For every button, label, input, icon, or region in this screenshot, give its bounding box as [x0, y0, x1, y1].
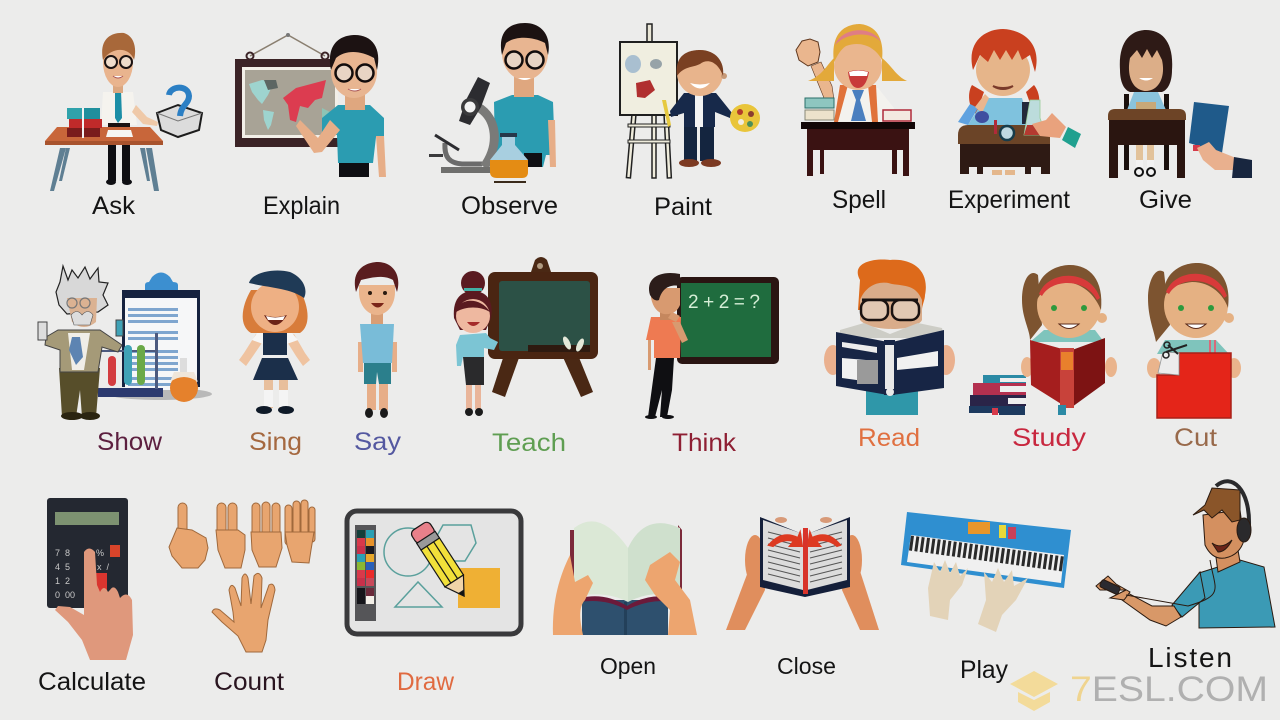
label: Draw: Draw: [397, 668, 455, 696]
item: Ask: [45, 33, 202, 220]
icon: man pointing at a world map: [235, 33, 386, 177]
icon: drawing tablet with shapes and pencil: [347, 511, 521, 634]
item: Think: [645, 273, 779, 457]
item: Observe: [429, 23, 558, 220]
icon: finger pressing calculator: 4 5: [55, 562, 70, 572]
icon: girl reading with stack of books: [969, 265, 1117, 416]
item: Say: [354, 262, 402, 456]
label: Cut: Cut: [1174, 424, 1217, 452]
item: Count: [169, 500, 315, 696]
item: Sing: [239, 270, 310, 456]
item: Read: [824, 260, 955, 452]
icon: counting hands one to five: [169, 500, 315, 652]
label: Play: Play: [960, 656, 1008, 684]
icon: finger pressing calculator: [47, 498, 133, 660]
item: Give: [1108, 30, 1252, 214]
icon: man thinking at chalkboard: [645, 273, 779, 419]
icon: graduation cap: [1010, 671, 1058, 711]
label: Sing: Sing: [249, 428, 302, 456]
icon: hands closing a book: [726, 517, 879, 630]
icon: man listening with headphones: [1096, 481, 1275, 628]
board equation: 2 + 2 = ?: [688, 292, 760, 313]
icon: finger pressing calculator: 0 00: [55, 590, 75, 600]
item: Explain: [235, 33, 386, 220]
icon: boy painting at easel: [620, 24, 760, 178]
icon: teacher beside chalkboard: [454, 257, 598, 416]
icon: boy speaking: [355, 262, 398, 418]
label: Open: Open: [600, 653, 656, 679]
item: Open: [553, 521, 697, 679]
icon: man at desk with question box: [45, 33, 202, 191]
label: Teach: Teach: [492, 429, 566, 457]
icon: finger pressing calculator: x /: [97, 562, 110, 572]
label: Observe: Observe: [461, 192, 558, 220]
label: Paint: Paint: [654, 193, 712, 221]
label: Read: Read: [858, 424, 920, 452]
item: Show: [38, 266, 212, 456]
label: Ask: Ask: [92, 192, 136, 220]
label: Spell: Spell: [832, 186, 886, 214]
item: Calculate: [38, 498, 146, 696]
label: Explain: Explain: [263, 192, 340, 220]
watermark logo: [1010, 670, 1268, 711]
icon: hands playing keyboard: [901, 512, 1071, 632]
label: Study: Study: [1012, 424, 1087, 452]
icon: girl with flasks at desk: [958, 29, 1081, 175]
item: Play: [901, 512, 1071, 684]
item: Study: [969, 265, 1117, 452]
label: Say: Say: [354, 428, 402, 456]
icon: girl raising hand at desk: [796, 24, 915, 176]
label: Listen: Listen: [1148, 642, 1232, 673]
icon: hands holding open book: [553, 521, 697, 635]
icon: finger pressing calculator: %: [96, 548, 104, 558]
item: Close: [726, 517, 879, 679]
item: Teach: [454, 257, 598, 457]
calculator keys: 7 8: [55, 548, 70, 558]
item: Listen: [1096, 481, 1275, 673]
icon: girl cutting red paper: [1147, 263, 1241, 418]
icon: boy reading large book: [824, 260, 955, 415]
icon: man with microscope and flask: [429, 23, 556, 183]
item: Spell: [796, 24, 915, 214]
item: Paint: [620, 24, 760, 221]
label: Calculate: Calculate: [38, 668, 146, 696]
icon: scientist with clipboard and test tubes: [38, 266, 212, 420]
label: Count: Count: [214, 668, 284, 696]
label: Show: Show: [97, 428, 163, 456]
icon: girl at desk receiving a book: [1108, 30, 1252, 178]
wordmark: 7ESL.COM: [1070, 670, 1268, 709]
item: Cut: [1147, 263, 1241, 452]
icon: schoolgirl singing: [239, 270, 310, 414]
label: Experiment: Experiment: [948, 186, 1070, 214]
label: Close: Close: [777, 653, 836, 679]
item: Experiment: [948, 29, 1081, 214]
item: Draw: [347, 511, 521, 696]
icon: finger pressing calculator: 1 2: [55, 576, 70, 586]
label: Think: Think: [672, 429, 737, 457]
label: Give: Give: [1139, 186, 1192, 214]
